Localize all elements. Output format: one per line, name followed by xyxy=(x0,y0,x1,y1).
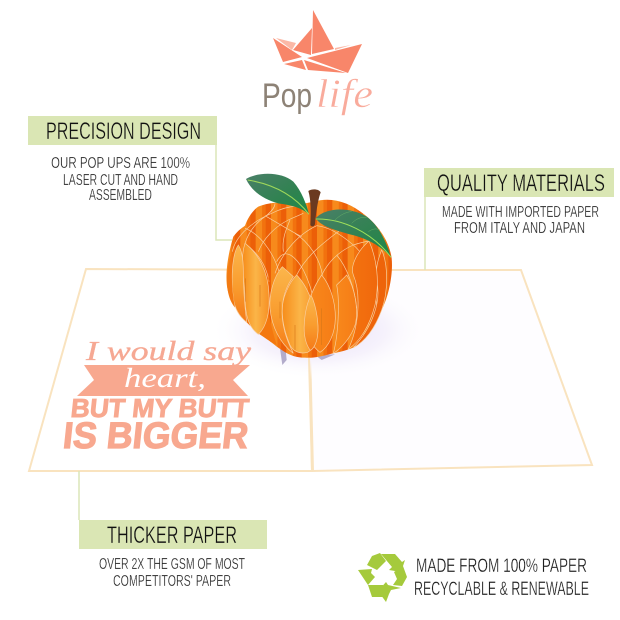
card shadow xyxy=(245,313,392,377)
heading bar xyxy=(28,116,217,145)
right lobe lattice xyxy=(275,226,377,308)
message line 4: IS BIGGER xyxy=(61,414,251,456)
card left panel xyxy=(29,269,312,471)
callout: precision design xyxy=(28,116,232,240)
card fold xyxy=(309,358,312,471)
petal slits xyxy=(246,278,322,350)
callout: quality materials xyxy=(424,168,614,270)
body text: OUR POP UPS ARE 100% xyxy=(51,155,190,172)
left lobe front petals xyxy=(258,273,277,345)
heading: PRECISION DESIGN xyxy=(46,118,201,145)
heading bar xyxy=(79,520,267,549)
body text xyxy=(51,155,190,204)
heading: THICKER PAPER xyxy=(107,522,237,549)
left leaf xyxy=(246,174,309,214)
message line 3: BUT MY BUTT xyxy=(69,393,251,423)
open card xyxy=(29,269,592,471)
right leaf xyxy=(316,209,391,257)
logo: Poplife: life xyxy=(316,71,373,116)
recycling note xyxy=(358,553,589,602)
logo: Poplife xyxy=(262,10,373,116)
pop-up peach xyxy=(226,174,392,365)
card right panel xyxy=(308,270,592,471)
paper tabs xyxy=(280,348,335,365)
stem xyxy=(308,189,321,226)
card message xyxy=(61,336,251,456)
icon: recycle xyxy=(358,553,407,602)
body text: OVER 2X THE GSM OF MOST xyxy=(99,556,245,573)
left lobe lattice xyxy=(232,203,303,282)
leader line xyxy=(424,197,426,270)
peach body xyxy=(226,200,392,358)
body text xyxy=(442,204,599,237)
message line 1: I would say xyxy=(85,336,251,366)
icon: origami boat xyxy=(273,10,362,73)
banner xyxy=(77,365,250,396)
right lobe front petals xyxy=(305,275,335,352)
leader line xyxy=(216,145,232,240)
message line 2: heart, xyxy=(124,363,206,393)
leader line xyxy=(78,471,80,520)
callout: thicker paper xyxy=(79,471,267,590)
body text xyxy=(99,556,245,590)
right lobe outer ribs xyxy=(353,250,387,348)
body text: COMPETITORS' PAPER xyxy=(113,573,231,590)
body text: LASER CUT AND HAND xyxy=(63,172,178,189)
logo wordmark: Pop xyxy=(262,77,312,115)
heading bar xyxy=(424,168,614,197)
body text: ASSEMBLED xyxy=(89,187,152,204)
